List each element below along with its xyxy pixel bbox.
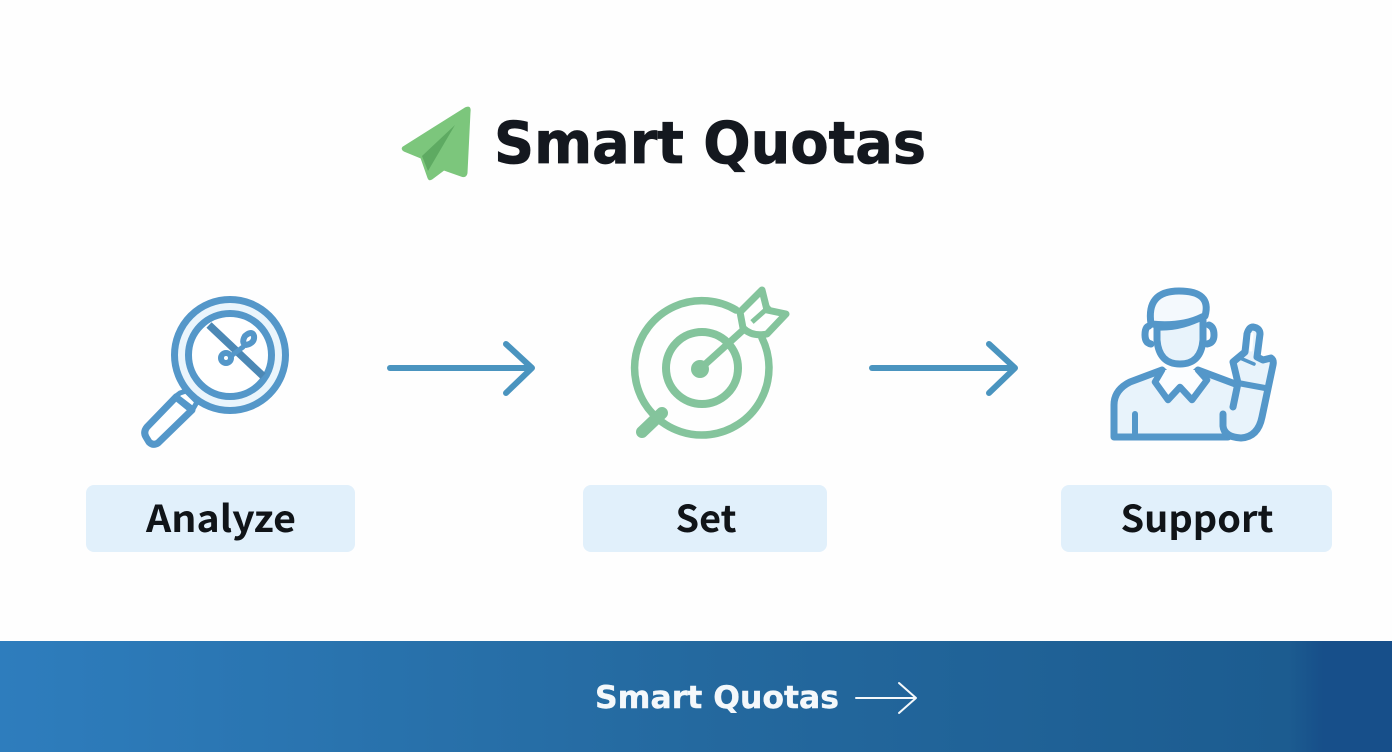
footer arrow — [856, 683, 916, 713]
title: Smart Quotas — [494, 109, 926, 177]
label: Set: Set — [676, 489, 736, 543]
arrow: set to support — [872, 344, 1015, 393]
label: Analyze — [86, 485, 355, 552]
icon: support person — [1114, 291, 1273, 438]
icon: target with arrow — [635, 290, 786, 435]
footer band — [0, 641, 1392, 752]
label: Support: Support — [1120, 489, 1274, 543]
label: Set — [583, 485, 827, 552]
footer text: Smart Quotas — [595, 680, 839, 716]
label: Analyze: Analyze — [145, 489, 296, 543]
label: Support — [1061, 485, 1332, 552]
arrow: analyze to set — [390, 344, 532, 393]
icon: paper plane — [402, 107, 470, 180]
icon: magnifying glass — [145, 300, 286, 444]
